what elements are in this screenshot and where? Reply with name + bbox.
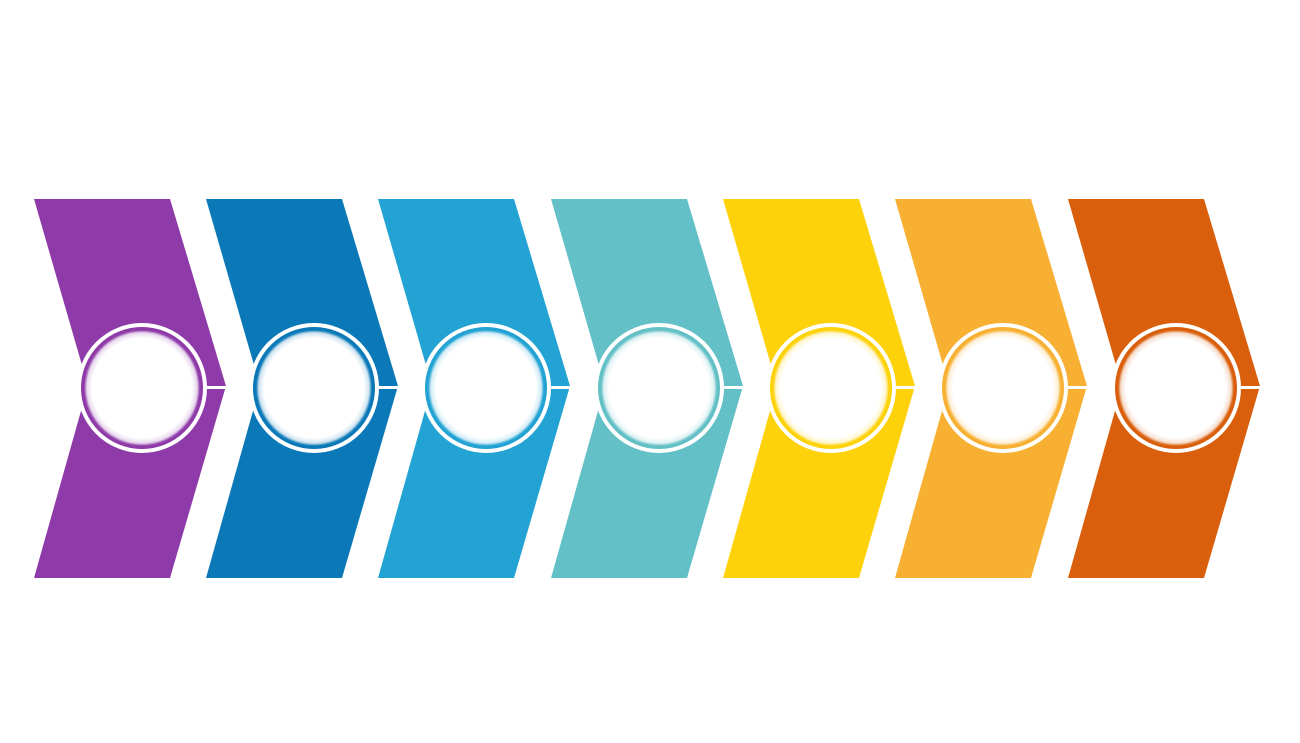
step 1 chevron (purple) (34, 199, 230, 578)
step 3 chevron (light blue) (378, 199, 574, 578)
step 2 chevron (blue) (206, 199, 402, 578)
step 4 chevron (teal) (551, 199, 747, 578)
step 7 chevron (dark orange) (1068, 199, 1264, 578)
step 5 chevron (yellow) (723, 199, 919, 578)
step 6 chevron (orange) (895, 199, 1091, 578)
